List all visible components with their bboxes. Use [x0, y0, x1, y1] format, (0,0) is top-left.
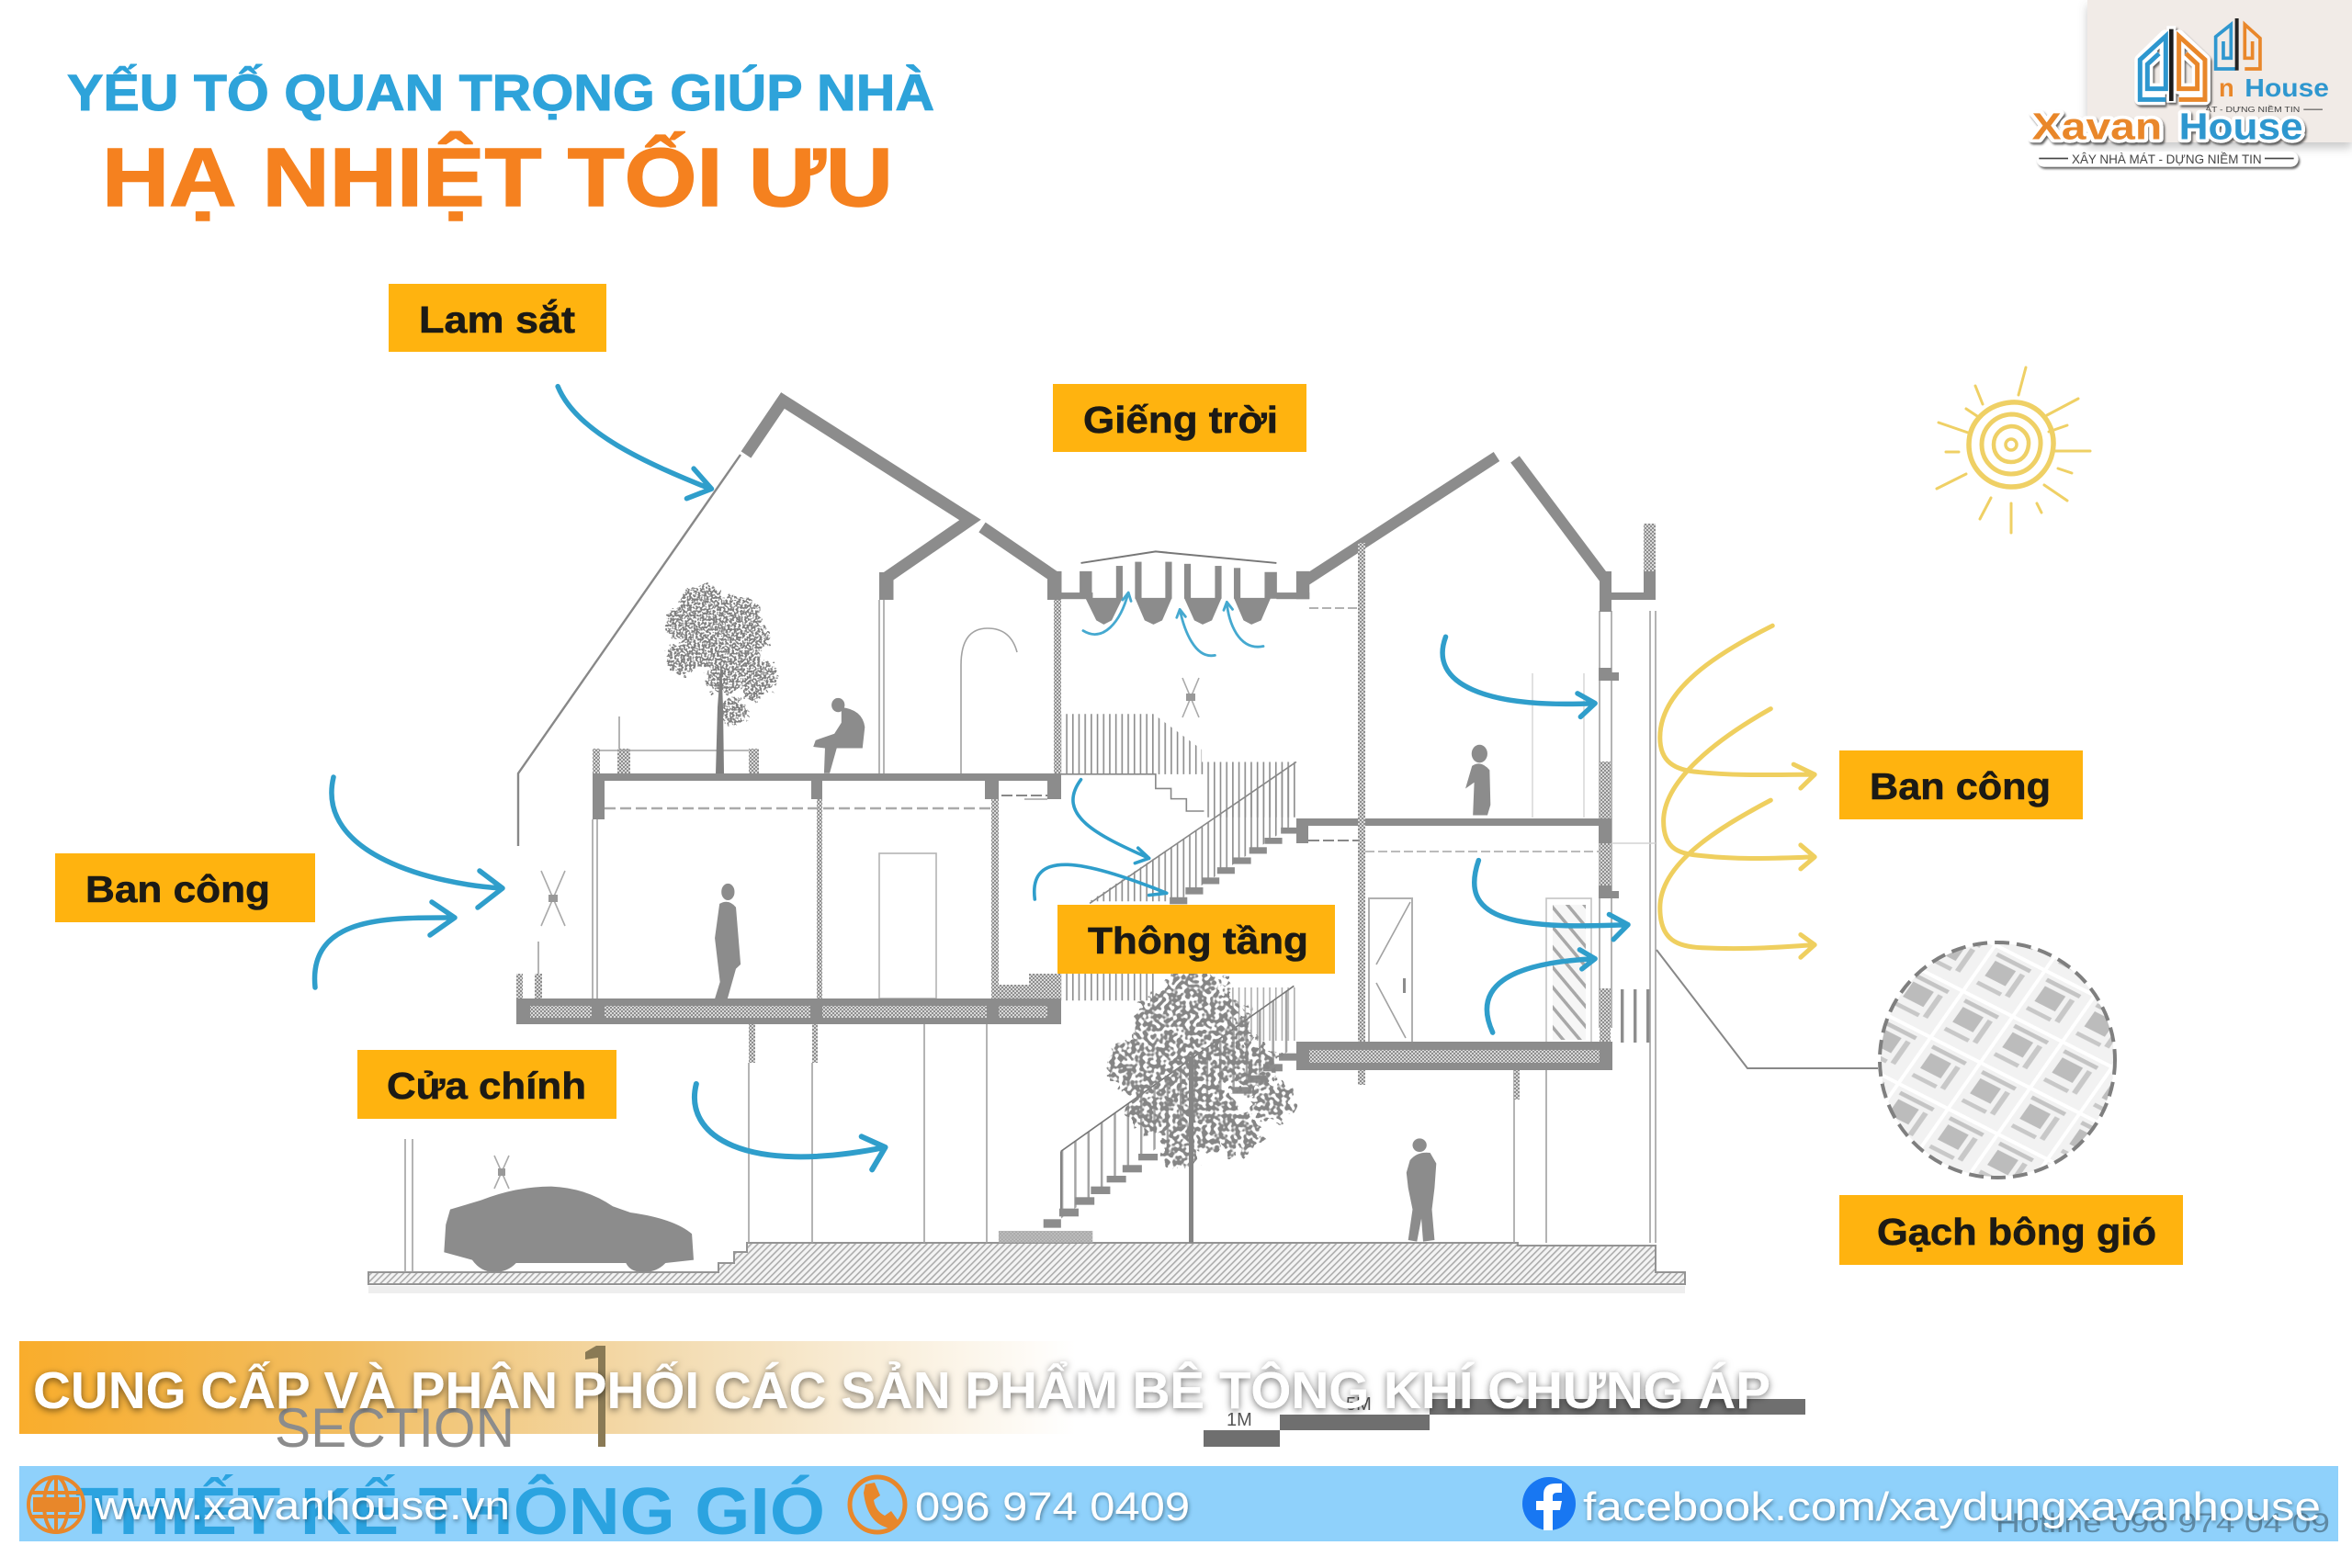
lower storey thin structure: [405, 611, 1656, 1272]
silhouette: car: [444, 1187, 694, 1272]
scale bar: 1M: [1227, 1410, 1252, 1430]
label: Giếng trời: [1053, 384, 1306, 452]
logo front sticker: [2032, 26, 2303, 167]
underlying section caption and scale: [275, 1346, 1805, 1459]
underlying hotline: Hotline 096 974 04 09: [1996, 1508, 2330, 1539]
skylight funnels: [1050, 551, 1309, 625]
label: Gạch bông gió: [1839, 1195, 2183, 1265]
silhouette: child: [1465, 745, 1490, 815]
arrows: lower right room: [1475, 861, 1628, 1032]
arrows: upper right room: [1442, 637, 1595, 716]
glazed louver line (Lam sắt): [518, 455, 741, 846]
logo front sticker: House: [2179, 106, 2303, 148]
contact bar: [19, 1466, 2338, 1549]
logo backing panel: [2087, 0, 2352, 142]
silhouette: sitting person: [813, 698, 865, 773]
ground reflection: [368, 1286, 1685, 1293]
label: Lam sắt: [389, 284, 606, 352]
title line 1: YẾU TỐ QUAN TRỌNG GIÚP NHÀ: [67, 63, 934, 121]
silhouette: standing person: [1407, 1138, 1436, 1242]
silhouette: walking person: [715, 884, 741, 998]
underlying heading: THIẾT KẾ THÔNG GIÓ: [75, 1474, 825, 1549]
tree on roof terrace: [664, 584, 777, 773]
roof: right gable: [1303, 457, 1656, 612]
staircase lower: [999, 986, 1296, 1243]
arrows: left Ban công: [315, 777, 503, 987]
facebook address: facebook.com/xaydungxavanhouse: [1583, 1484, 2321, 1529]
yellow heat arrows: [1660, 626, 1815, 957]
logo back copy: n: [2219, 73, 2234, 102]
title: [67, 63, 934, 224]
blue air-flow arrows: [315, 387, 1628, 1169]
icon: sun: [1937, 367, 2090, 533]
logo back copy: [2205, 18, 2329, 114]
title line 2: HẠ NHIỆT TỐI ƯU: [102, 130, 893, 224]
label: Ban công left: Ban công: [85, 868, 270, 910]
logo: Xavan House: [2032, 0, 2352, 167]
section drawing: house cross-section: [368, 400, 1685, 1293]
logo front sticker: XÂY NHÀ MÁT - DỰNG NIỀM TIN: [2072, 152, 2262, 166]
roof: left gable: [746, 400, 1061, 600]
breeze block detail: [1657, 942, 2115, 1178]
icon: phone: [850, 1477, 905, 1532]
tree in atrium: [1109, 965, 1293, 1243]
label: Lam sắt: Lam sắt: [419, 299, 575, 341]
label: Gạch bông gió: Gạch bông gió: [1877, 1211, 2156, 1253]
right side storeys and walls: [1296, 543, 1656, 1085]
phone number: 096 974 0409: [915, 1484, 1190, 1529]
website: www.xavanhouse.vn: [94, 1483, 510, 1529]
label: Ban công right: [1839, 750, 2083, 819]
label: Ban công right: Ban công: [1870, 765, 2051, 807]
promo banner text: CUNG CẤP VÀ PHÂN PHỐI CÁC SẢN PHẨM BÊ TÔNG KHÍ CHƯNG ÁP: [33, 1360, 1770, 1420]
label: Thông tầng: [1057, 905, 1335, 974]
logo back copy: ÁT - DỰNG NIỀM TIN: [2205, 105, 2300, 114]
label: Ban công left: [55, 853, 315, 922]
scale bar: [1204, 1394, 1805, 1447]
logo front sticker: Xavan: [2032, 106, 2162, 148]
big numeral: [585, 1346, 605, 1447]
label: Cửa chính: Cửa chính: [387, 1065, 586, 1107]
leader line: [1657, 950, 1878, 1068]
hanging lights: [494, 678, 1199, 1189]
label: Giếng trời: Giếng trời: [1083, 399, 1278, 441]
label: Cửa chính: [357, 1050, 616, 1119]
floor slab: left: [516, 942, 1061, 1024]
breeze block circle: [1880, 942, 2115, 1178]
scale bar: 5M: [1346, 1394, 1372, 1415]
ground terrain: [368, 1243, 1685, 1284]
label: Thông tầng: Thông tầng: [1088, 919, 1308, 962]
orange promo banner: [19, 1341, 1076, 1434]
logo back copy: House: [2245, 73, 2329, 102]
bar background: [19, 1466, 2338, 1541]
icon: facebook: [1522, 1477, 1576, 1530]
arrows: atrium: [1035, 780, 1167, 899]
arrow: Cửa chính: [695, 1084, 886, 1169]
arrows: skylight: [1083, 592, 1263, 656]
roof terrace parapets: [593, 716, 759, 773]
upper left slab and walls: [593, 600, 1061, 998]
staircase upper: [1061, 714, 1296, 1041]
floor slab: right: [1296, 1042, 1612, 1070]
arrow: Lam sắt: [558, 387, 711, 499]
icon: globe: [28, 1477, 84, 1532]
caption SECTION 1: SECTION: [275, 1397, 514, 1459]
